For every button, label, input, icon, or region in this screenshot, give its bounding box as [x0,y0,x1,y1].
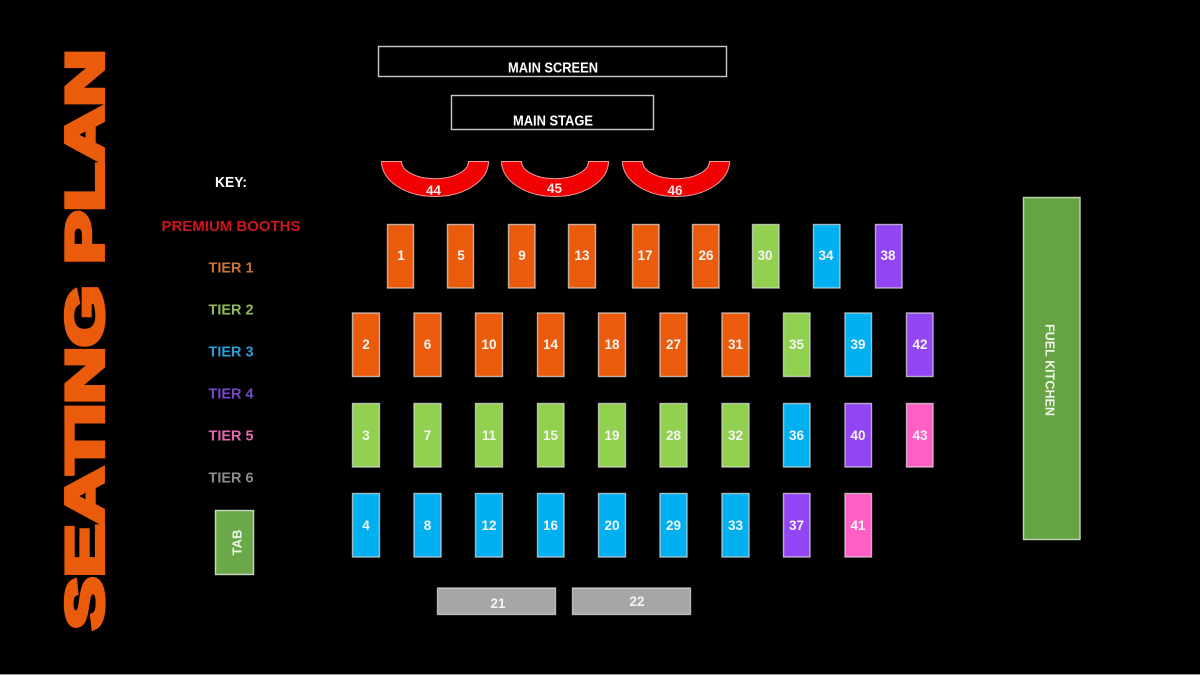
table 40 [845,404,872,467]
table 17 [632,224,659,288]
table 15 [538,404,564,467]
tab block: TAB [230,530,244,555]
tab block [216,510,254,574]
table 19 [598,404,626,467]
table 14 [538,313,564,376]
table 10 [476,313,502,376]
table 39 [845,313,872,376]
table 7 [414,404,441,467]
table 21: 21 [490,596,506,611]
table 38 [876,224,902,288]
legend: tier 4: TIER 4 [208,386,254,402]
table 4: 4 [362,518,370,533]
booth 45 [502,162,608,197]
table 35 [784,313,810,376]
table 40: 40 [850,428,866,443]
table 16 [538,494,564,557]
title: seating plan: SEATING PLAN [56,50,115,630]
fuel kitchen block: FUEL KITCHEN [1042,324,1056,416]
table 7: 7 [424,428,431,443]
table 1 [388,224,414,288]
table 6: 6 [424,337,432,352]
table 43 [906,404,933,467]
table 1: 1 [397,248,405,263]
table 37: 37 [789,518,804,533]
table row 1 [388,224,902,288]
legend: tier 3: TIER 3 [208,344,254,360]
table 9 [508,224,535,288]
table 5: 5 [457,248,465,263]
table 33: 33 [728,518,743,533]
table 42 [906,313,933,376]
table 20: 20 [604,518,620,533]
table 3 [352,404,380,467]
table 16: 16 [543,518,558,533]
table row 4 [352,494,872,557]
table 19: 19 [604,428,620,443]
booth 44 [382,162,488,198]
main stage [452,96,654,130]
table 42: 42 [912,337,928,352]
table 36: 36 [789,428,804,443]
table 4 [352,494,380,557]
legend: tier 1: TIER 1 [208,260,254,276]
table 13 [568,224,596,288]
table 2 [352,313,380,376]
table 39: 39 [850,337,866,352]
booth 46 [622,162,730,198]
table 31 [722,313,749,376]
table 22: 22 [629,594,645,609]
table 26: 26 [698,248,714,263]
legend: premium booths: PREMIUM BOOTHS [162,219,301,235]
table 21 [438,588,556,614]
table 27 [660,313,687,376]
legend: tier 5: TIER 5 [208,428,254,444]
legend: tier 6: TIER 6 [208,470,254,486]
table 34 [814,224,840,288]
main stage: MAIN STAGE [513,114,593,130]
booth 46: 46 [667,183,683,198]
table 10: 10 [481,337,497,352]
table row 3 [352,404,933,467]
table 41 [845,494,872,557]
table 6 [414,313,441,376]
table 33 [722,494,749,557]
table 34: 34 [818,248,834,263]
table row 2 [352,313,933,376]
table 18 [598,313,626,376]
table 5 [448,224,474,288]
booth 45: 45 [547,181,562,196]
table 26 [692,224,719,288]
table 35: 35 [789,337,804,352]
table 22 [572,588,690,614]
booth 44: 44 [426,183,441,198]
panel: key legend [162,175,301,486]
table 36 [784,404,810,467]
main screen [378,46,726,76]
table 29 [660,494,687,557]
table 43: 43 [912,428,928,443]
table 12: 12 [481,518,497,533]
table 3: 3 [362,428,370,443]
table 20 [598,494,626,557]
tier 6 tables [438,588,690,614]
table 15: 15 [543,428,558,443]
table 41: 41 [850,518,866,533]
table 8 [414,494,441,557]
table 11: 11 [482,428,497,443]
table 28: 28 [666,428,681,443]
key heading: KEY: [215,175,247,191]
premium booths [382,162,730,198]
table 37 [784,494,810,557]
table 12 [476,494,502,557]
main screen: MAIN SCREEN [508,60,598,76]
table 2: 2 [362,337,370,352]
table 9: 9 [518,248,526,263]
table 13: 13 [574,248,590,263]
fuel kitchen block [1024,198,1080,540]
table 27: 27 [666,337,681,352]
table 30: 30 [757,248,773,263]
table 38: 38 [880,248,896,263]
table 31: 31 [728,337,743,352]
table 11 [476,404,502,467]
table 17: 17 [637,248,653,263]
table 14: 14 [543,337,558,352]
table 18: 18 [604,337,620,352]
table 8: 8 [424,518,432,533]
table 32 [722,404,749,467]
table 30 [752,224,779,288]
table 29: 29 [666,518,681,533]
table 28 [660,404,687,467]
table 32: 32 [728,428,743,443]
legend: tier 2: TIER 2 [208,302,254,318]
